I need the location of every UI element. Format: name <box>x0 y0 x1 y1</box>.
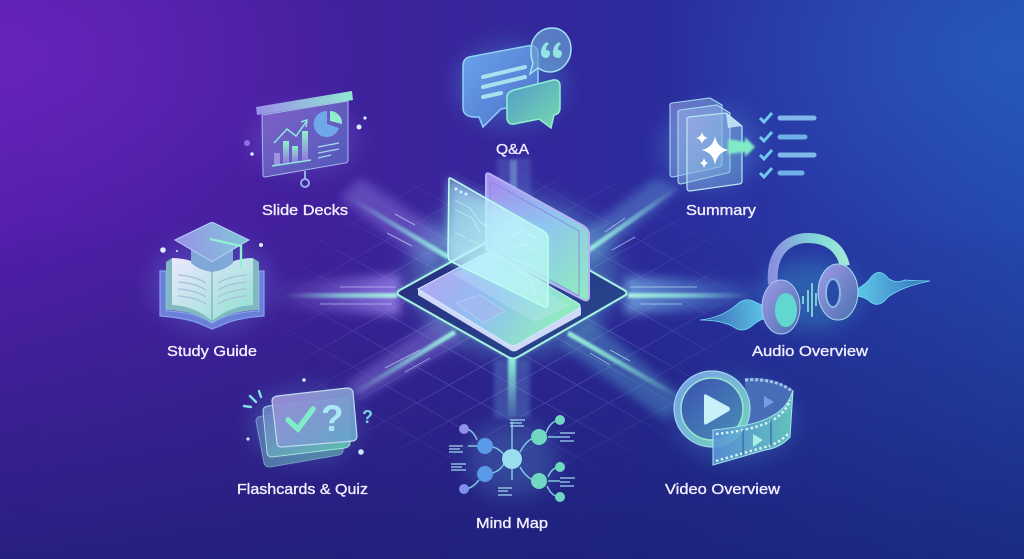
sparkle dots <box>160 243 263 253</box>
equalizer bars <box>803 283 820 317</box>
film play icon <box>753 434 763 447</box>
right sound wave <box>855 272 930 304</box>
center node <box>502 449 522 469</box>
left sound wave <box>700 300 770 330</box>
icon: checklist <box>760 113 814 177</box>
play button disc <box>674 371 750 447</box>
beam to Slide Decks <box>340 178 455 268</box>
film front <box>713 390 793 465</box>
beam to Summary <box>575 178 680 266</box>
beam to Flashcards and Quiz <box>345 315 465 400</box>
label: Audio Overview <box>752 343 868 360</box>
headband <box>773 238 845 284</box>
film back <box>745 378 792 425</box>
bubble text lines <box>483 67 525 97</box>
front glass screen <box>448 178 548 308</box>
speech bubble large <box>463 46 538 127</box>
item: Video Overview <box>665 371 795 498</box>
graduation cap <box>191 245 233 272</box>
icon: stacked cards <box>244 378 373 467</box>
arrow <box>728 137 755 157</box>
item: Audio Overview <box>700 238 930 360</box>
question mark: ? <box>321 398 344 439</box>
perspective grid floor <box>286 170 738 474</box>
item: Mind Map <box>449 415 575 532</box>
icon: stacked documents <box>660 98 760 191</box>
item: Slide Decks <box>244 91 367 219</box>
sparkle dots <box>244 116 367 156</box>
icon: presentation board <box>244 91 367 187</box>
stand <box>304 171 306 179</box>
sparkle stars <box>696 132 729 168</box>
book pages <box>166 258 259 323</box>
small play in film <box>764 396 774 408</box>
keyboard <box>452 257 570 322</box>
laptop glow <box>408 195 618 355</box>
label: Q&A <box>496 141 529 158</box>
sparks <box>244 391 261 407</box>
laptop base <box>418 253 581 352</box>
connector beams from laptop to each output <box>268 158 770 423</box>
bar chart <box>272 131 311 166</box>
tassel <box>210 239 241 267</box>
platform <box>395 226 628 360</box>
label: Summary <box>686 202 757 219</box>
label: Mind Map <box>476 515 548 532</box>
label: Flashcards & Quiz <box>237 481 368 498</box>
icon: chat bubbles <box>455 28 571 128</box>
text lines <box>318 143 339 158</box>
frame dividers <box>743 420 771 455</box>
pie chart <box>314 111 342 137</box>
circuit traces <box>455 200 540 296</box>
beam to Mind Map <box>494 358 530 423</box>
trend arrow <box>274 120 307 143</box>
small question mark: ? <box>362 407 373 427</box>
speech bubble small <box>507 80 560 128</box>
label: Study Guide <box>167 343 257 360</box>
sparkle dots <box>246 378 364 455</box>
check mark <box>288 409 313 429</box>
blue nodes <box>477 438 493 482</box>
page text lines <box>178 275 247 304</box>
icon: open book with graduation cap <box>150 222 274 333</box>
green nodes <box>531 429 547 489</box>
item: Study Guide <box>150 222 274 360</box>
label: Slide Decks <box>262 202 348 219</box>
laptop back screen <box>486 173 589 300</box>
book cover <box>160 271 264 329</box>
icon: headphones with sound waves <box>700 238 930 334</box>
beam to Q&A <box>497 158 531 198</box>
beam to Video Overview <box>560 318 685 420</box>
sprocket rows <box>716 400 790 461</box>
central laptop with floating glass screens <box>395 173 628 360</box>
beam to Audio Overview <box>625 276 770 314</box>
left ear cup <box>762 280 800 334</box>
icon: play button with film strip <box>674 371 795 465</box>
item: Flashcards & Quiz <box>237 378 373 498</box>
connectors <box>464 420 560 497</box>
trackpad <box>456 295 505 323</box>
window dots <box>454 188 468 196</box>
top bar <box>256 91 353 115</box>
quote bubble <box>530 28 571 74</box>
right ear cup <box>818 264 858 320</box>
leaf nodes <box>459 415 565 502</box>
beam to Study Guide <box>268 274 400 316</box>
label: Video Overview <box>665 481 780 498</box>
item: Summary <box>660 98 814 219</box>
icon: mind map nodes <box>449 415 575 502</box>
item: Q&A <box>455 28 571 158</box>
mini text labels <box>449 420 575 495</box>
